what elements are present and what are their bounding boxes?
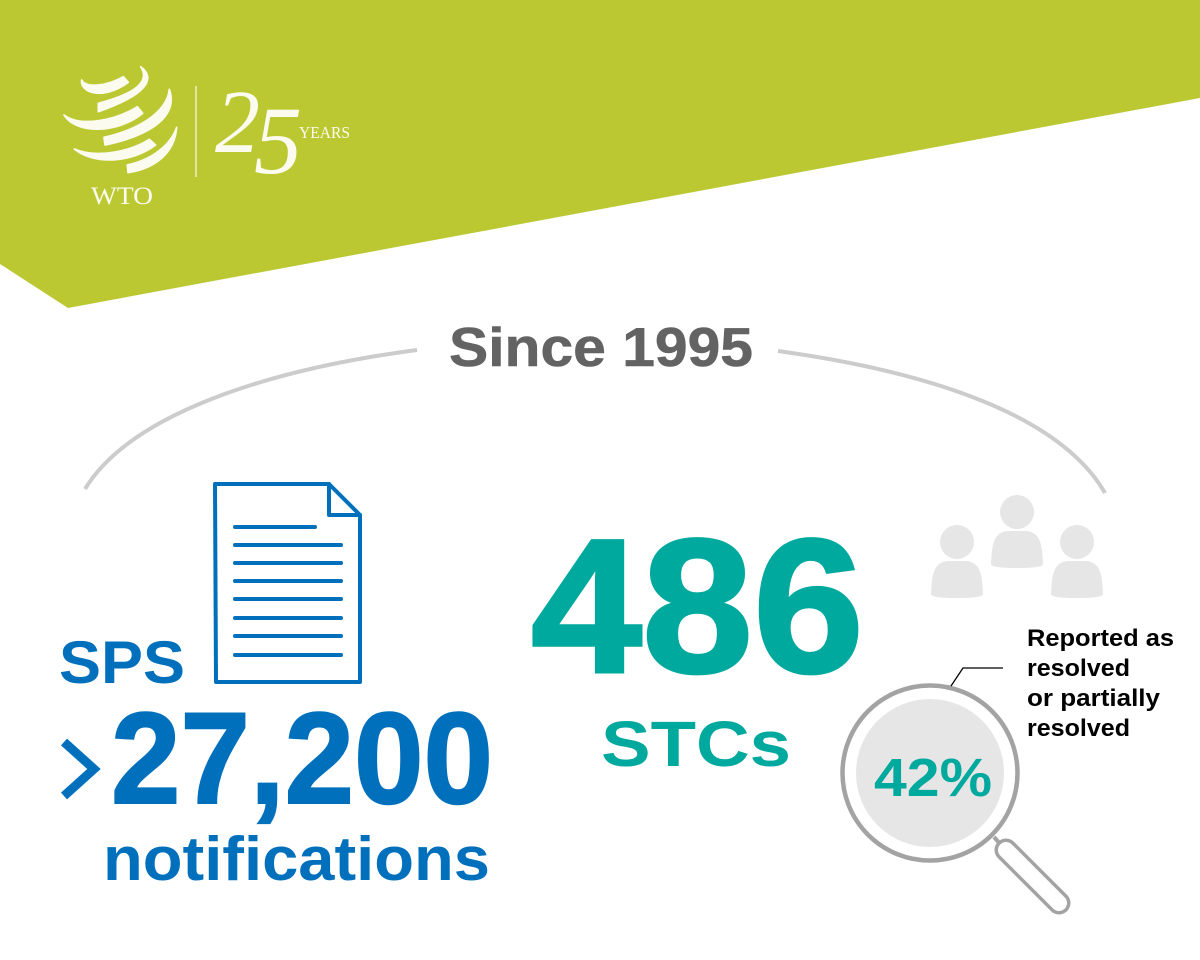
panel: STCs — [531, 500, 864, 780]
logo divider — [195, 86, 197, 177]
25 numeral — [215, 73, 302, 194]
YEARS label: YEARS — [299, 123, 350, 142]
STCs label: STCs — [601, 708, 791, 780]
25 numeral: 2 — [215, 73, 260, 172]
SPS label: SPS — [59, 629, 185, 696]
notifications label: notifications — [103, 825, 490, 894]
callout text: resolved — [1027, 715, 1130, 742]
resolved percentage: 42% — [874, 748, 992, 808]
icon: WTO globe — [64, 67, 177, 173]
icon: greater-than sign — [64, 742, 94, 796]
icon: magnifying glass — [842, 686, 1059, 903]
notifications count: 27,200 — [111, 685, 493, 831]
icon: people — [931, 495, 1103, 598]
WTO 25 years logo — [64, 67, 350, 210]
STC count: 486 — [531, 500, 864, 713]
callout leader line — [951, 668, 1003, 686]
callout text — [1027, 625, 1174, 742]
arc bracket — [85, 350, 1105, 493]
header banner — [0, 0, 1200, 308]
icon: document — [215, 484, 360, 682]
callout text: Reported as — [1027, 625, 1174, 652]
panel: SPS notifications — [59, 484, 493, 894]
title: Since 1995 — [449, 316, 753, 378]
callout text: or partially — [1027, 685, 1161, 712]
callout text: resolved — [1027, 655, 1130, 682]
25 numeral: 5 — [254, 87, 302, 194]
WTO wordmark: WTO — [91, 183, 153, 210]
